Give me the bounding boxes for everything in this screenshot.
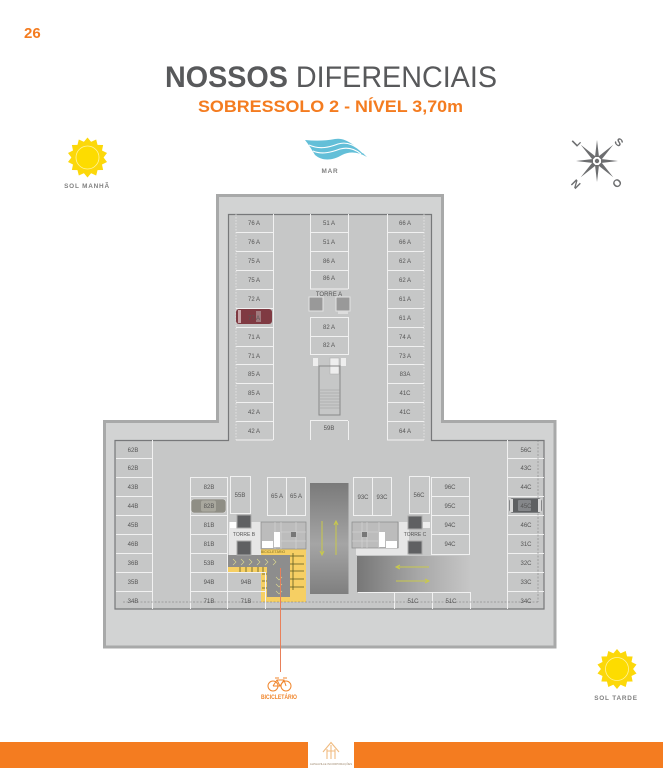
labels lower: 53B — [204, 561, 214, 567]
bike room: BICICLETÁRIO — [261, 550, 285, 554]
labels tower A: 66 A — [399, 240, 411, 246]
labels tower A: 75 A — [248, 278, 260, 284]
labels tower A: 62 A — [399, 278, 411, 284]
labels tower A: 71 A — [248, 354, 260, 360]
car: dark — [509, 498, 542, 513]
labels tower A — [248, 221, 411, 435]
labels tower A: 86 A — [323, 276, 335, 282]
labels lower: 34C — [520, 599, 532, 605]
labels lower: 51C — [445, 599, 457, 605]
icon: sea waves — [305, 139, 367, 160]
labels lower: 44B — [128, 504, 138, 510]
labels tower A: 71 A — [248, 335, 260, 341]
labels lower: 62B — [128, 466, 138, 472]
labels lower: 65 A — [290, 494, 302, 500]
ramp arrows — [320, 521, 429, 583]
labels tower A: 85 A — [248, 391, 260, 397]
label: mar: MAR — [322, 168, 338, 175]
footer logo — [308, 742, 354, 768]
car: beige — [191, 499, 226, 513]
labels lower: 96C — [444, 485, 456, 491]
subtitle: SOBRESSOLO 2 - NÍVEL 3,70m — [198, 97, 463, 116]
labels lower: TORRE C — [404, 532, 427, 538]
labels tower A: 66 A — [399, 221, 411, 227]
labels lower: 93C — [357, 495, 369, 501]
labels lower: 82B — [204, 504, 214, 510]
page number: 26 — [24, 25, 41, 42]
labels lower: 55B — [235, 493, 245, 499]
footer bar — [0, 742, 663, 768]
labels tower A: 82 A — [323, 343, 335, 349]
labels tower A: 61 A — [399, 316, 411, 322]
labels tower A: 42 A — [248, 410, 260, 416]
labels tower A: 74 A — [399, 335, 411, 341]
labels lower: 56C — [413, 493, 425, 499]
icon: compass: S — [611, 136, 625, 150]
labels tower A: 61 A — [399, 297, 411, 303]
ramp: central — [310, 483, 348, 594]
labels lower: 44C — [520, 485, 532, 491]
labels tower A: 73 A — [399, 354, 411, 360]
labels lower: 46C — [520, 523, 532, 529]
building outer wall — [104, 196, 555, 647]
labels tower A: 41C — [399, 410, 411, 416]
labels lower: 35B — [128, 580, 138, 586]
labels tower A: 75 A — [248, 259, 260, 265]
callout line — [280, 568, 282, 672]
labels lower: 46B — [128, 542, 138, 548]
panel: floor plan — [104, 196, 555, 647]
labels lower: 33C — [520, 580, 532, 586]
bike room — [228, 549, 306, 602]
label: sol tarde: SOL TARDE — [594, 695, 638, 702]
icon: morning sun — [67, 137, 108, 178]
labels lower: 62B — [128, 448, 138, 454]
labels tower A: 82 A — [323, 325, 335, 331]
labels tower A: 64 A — [399, 429, 411, 435]
labels tower A: 85 A — [248, 372, 260, 378]
labels lower: 94C — [444, 523, 456, 529]
labels lower: 65 A — [271, 494, 283, 500]
labels lower: 31C — [520, 542, 532, 548]
labels tower A: TORRE A — [316, 292, 342, 298]
labels lower: 56C — [520, 448, 532, 454]
tower A core — [309, 297, 350, 415]
labels lower: 82B — [204, 485, 214, 491]
icon: compass — [568, 136, 625, 192]
labels lower: 93C — [376, 495, 388, 501]
icon: afternoon sun — [596, 649, 638, 689]
labels tower A: 83A — [400, 372, 410, 378]
labels tower A: 42 A — [248, 429, 260, 435]
footer logo: ALPHAVILLE INCORPORAÇÕES — [310, 761, 352, 766]
labels tower A: 77 A — [248, 316, 260, 322]
labels tower A: 86 A — [323, 259, 335, 265]
labels lower: 71B — [204, 599, 214, 605]
labels lower: 36B — [128, 561, 138, 567]
labels lower: 32C — [520, 561, 532, 567]
icon: compass: N — [568, 178, 582, 192]
title: NOSSOS DIFERENCIAIS — [165, 61, 497, 94]
icon: compass: O — [610, 176, 625, 191]
car: red — [236, 309, 272, 324]
labels tower A: 72 A — [248, 297, 260, 303]
labels lower: 81B — [204, 523, 214, 529]
labels lower: 94C — [444, 542, 456, 548]
parking bays lower — [116, 440, 544, 609]
parking bays tower A — [236, 214, 424, 440]
label: sol manha: SOL MANHÃ — [64, 181, 110, 190]
labels lower: 94B — [204, 580, 214, 586]
labels lower: 81B — [204, 542, 214, 548]
labels tower A: 51 A — [323, 221, 335, 227]
labels lower: 94B — [241, 580, 251, 586]
labels tower A: 41C — [399, 391, 411, 397]
labels lower: 45C — [520, 504, 532, 510]
labels tower A: 76 A — [248, 221, 260, 227]
labels lower: 51C — [407, 599, 419, 605]
ramp: right — [357, 556, 470, 592]
label: bicicletario: BICICLETÁRIO — [261, 694, 297, 701]
icon: compass: L — [570, 136, 584, 149]
labels lower: 43C — [520, 466, 532, 472]
labels lower: TORRE B — [233, 532, 256, 538]
labels tower A: 62 A — [399, 259, 411, 265]
labels lower — [128, 448, 532, 605]
labels lower: 71B — [241, 599, 251, 605]
tower C core — [352, 516, 430, 555]
icon: bicycle — [268, 678, 291, 691]
labels lower: 95C — [444, 504, 456, 510]
labels tower A: 76 A — [248, 240, 260, 246]
parking floor — [115, 214, 544, 609]
labels tower A: 59B — [324, 426, 334, 432]
tower B core — [229, 515, 306, 555]
labels lower: 43B — [128, 485, 138, 491]
labels lower: 45B — [128, 523, 138, 529]
labels lower: 34B — [128, 599, 138, 605]
labels tower A: 51 A — [323, 240, 335, 246]
